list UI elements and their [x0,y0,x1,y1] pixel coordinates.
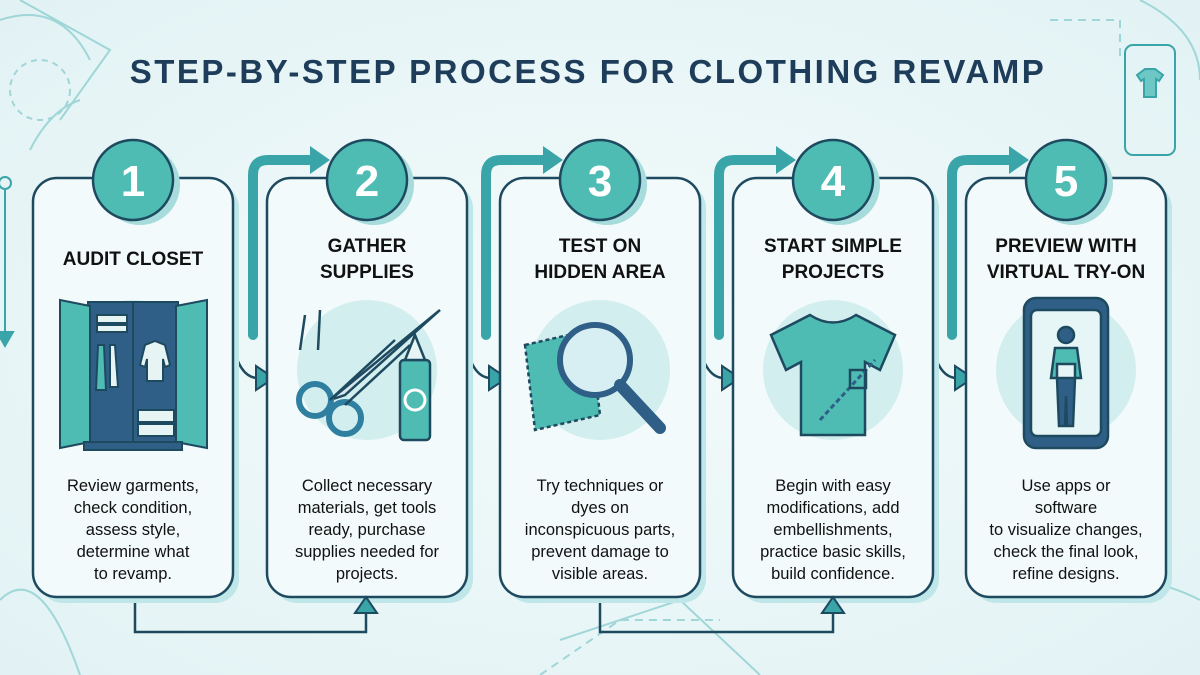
panel: step 1: Review garments, [67,477,199,495]
panel: step 3: prevent damage to [531,543,669,561]
panel: step 5: to visualize changes, [989,521,1143,539]
panel: step 5: check the final look, [994,543,1138,561]
panel: step 2: ready, purchase [308,521,426,539]
panel: step 3: visible areas. [552,565,648,583]
panel: step 1: 1 [121,157,145,206]
panel: step 3: dyes on [571,499,629,517]
panel: step 5: 5 [1054,157,1078,206]
panel: step 4: 4 [821,157,846,206]
connectors [253,160,1009,335]
panel: step 4: START SIMPLE [764,236,902,257]
panel: step 3: 3 [588,157,612,206]
panel: step 3 [500,140,706,603]
panel: step 5: VIRTUAL TRY-ON [987,262,1145,283]
arrow: bottom connector heads [355,597,844,613]
icon: t-shirt [763,300,903,440]
panel: step 1: check condition, [74,499,192,517]
panel: step 2: materials, get tools [298,499,436,517]
panel: step 1 [33,140,239,603]
panel: step 4: Begin with easy [775,477,892,495]
panel: step 3: Try techniques or [537,477,664,495]
icon: magnifier over fabric [525,300,670,440]
panel: step 3: HIDDEN AREA [534,262,666,283]
panel: step 2: 2 [355,157,379,206]
decorative left arrow [0,177,13,346]
panel: step 1: to revamp. [94,565,172,583]
panel: step 4: practice basic skills, [760,543,906,561]
panel: step 1: AUDIT CLOSET [63,249,204,270]
panel: step 5: PREVIEW WITH [995,236,1137,257]
panel: step 5: Use apps or [1022,477,1111,495]
panel: step 3: TEST ON [559,236,641,257]
panel: step 2: GATHER [328,236,407,257]
panel: step 2: supplies needed for [295,543,440,561]
panel: step 4: modifications, add [766,499,900,517]
panel: step 4: PROJECTS [782,262,884,283]
panel: step 3: inconspicuous parts, [525,521,675,539]
panel: step 2: SUPPLIES [320,262,414,283]
panel: step 2: projects. [336,565,398,583]
panel: step 4: build confidence. [771,565,895,583]
panel: step 5: software [1035,499,1097,517]
icon: wardrobe [60,300,207,450]
panel: step 4 [733,140,939,603]
panel: step 2 [267,140,473,603]
title: STEP-BY-STEP PROCESS FOR CLOTHING REVAMP [130,53,1046,90]
panel: step 1: determine what [77,543,190,561]
icon: phone with avatar [996,298,1136,448]
icon: scissors and glue [297,300,440,440]
panel: step 1: assess style, [86,521,180,539]
panel: step 4: embellishments, [773,521,893,539]
icon: phone top right [1125,45,1175,155]
panel: step 5: refine designs. [1012,565,1120,583]
panel: step 2: Collect necessary [302,477,433,495]
panel: step 5 [966,140,1172,603]
